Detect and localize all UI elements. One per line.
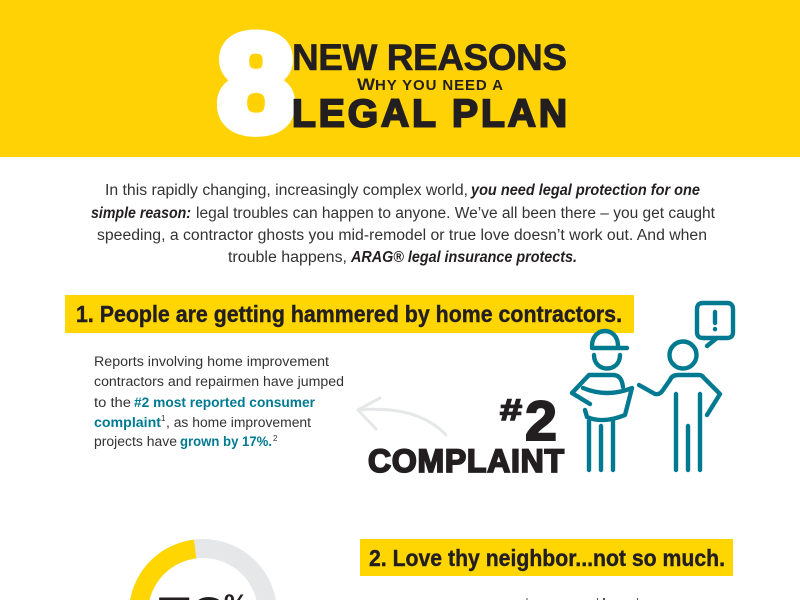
title (218, 7, 567, 159)
intro paragraph: you need legal protection for one (470, 182, 700, 199)
section 1 body text: projects have (94, 434, 177, 449)
title line: legal plan: LEGAL PLAN (292, 92, 567, 136)
section 1 body text: 2 (273, 434, 278, 443)
section 1 heading: 1. People are getting hammered by home contractors. (76, 301, 622, 327)
arrow pointing to text (358, 398, 446, 435)
title line: new reasons: NEW REASONS (292, 37, 567, 78)
section 1 body text: contractors and repairmen have jumped (94, 374, 344, 389)
intro paragraph: simple reason: (91, 205, 191, 222)
section 1 heading (65, 295, 634, 333)
#2 complaint stat: # (500, 394, 522, 427)
section 2 heading: 2. Love thy neighbor...not so much. (369, 545, 725, 571)
title line: why you need a: W (357, 75, 376, 94)
intro paragraph: ARAG® legal insurance protects. (350, 249, 577, 266)
header band (0, 0, 800, 157)
section 1 body text: #2 most reported consumer (134, 395, 316, 410)
section 1 body text (94, 354, 344, 449)
intro paragraph: legal troubles can happen to anyone. We’ve all been there – you get caught (196, 205, 716, 222)
section 1 body text: complaint (94, 415, 162, 430)
section 2 heading (360, 539, 733, 576)
icon: customer with speech bubble (639, 303, 733, 470)
section 1 body text: grown by 17%. (180, 434, 272, 449)
#2 complaint stat: COMPLAINT (368, 443, 564, 479)
section 1 body text: , as home improvement (166, 415, 311, 430)
intro paragraph (91, 182, 716, 266)
title line: why you need a: HY YOU NEED A (375, 77, 503, 94)
big number 8: 8 (218, 7, 294, 159)
intro paragraph: In this rapidly changing, increasingly complex world, (105, 182, 468, 199)
section 1 body text: Reports involving home improvement (94, 354, 329, 369)
intro paragraph: trouble happens, (228, 249, 347, 266)
#2 complaint stat (368, 389, 564, 479)
icon: contractor with blueprint (572, 331, 632, 470)
#2 complaint stat: 2 (525, 389, 557, 452)
section 1 body text: 1 (161, 414, 166, 423)
donut chart (138, 548, 268, 600)
section 1 body text: to the (94, 395, 131, 410)
intro paragraph: speeding, a contractor ghosts you mid-remodel or true love doesn’t work out. And when (97, 227, 707, 244)
